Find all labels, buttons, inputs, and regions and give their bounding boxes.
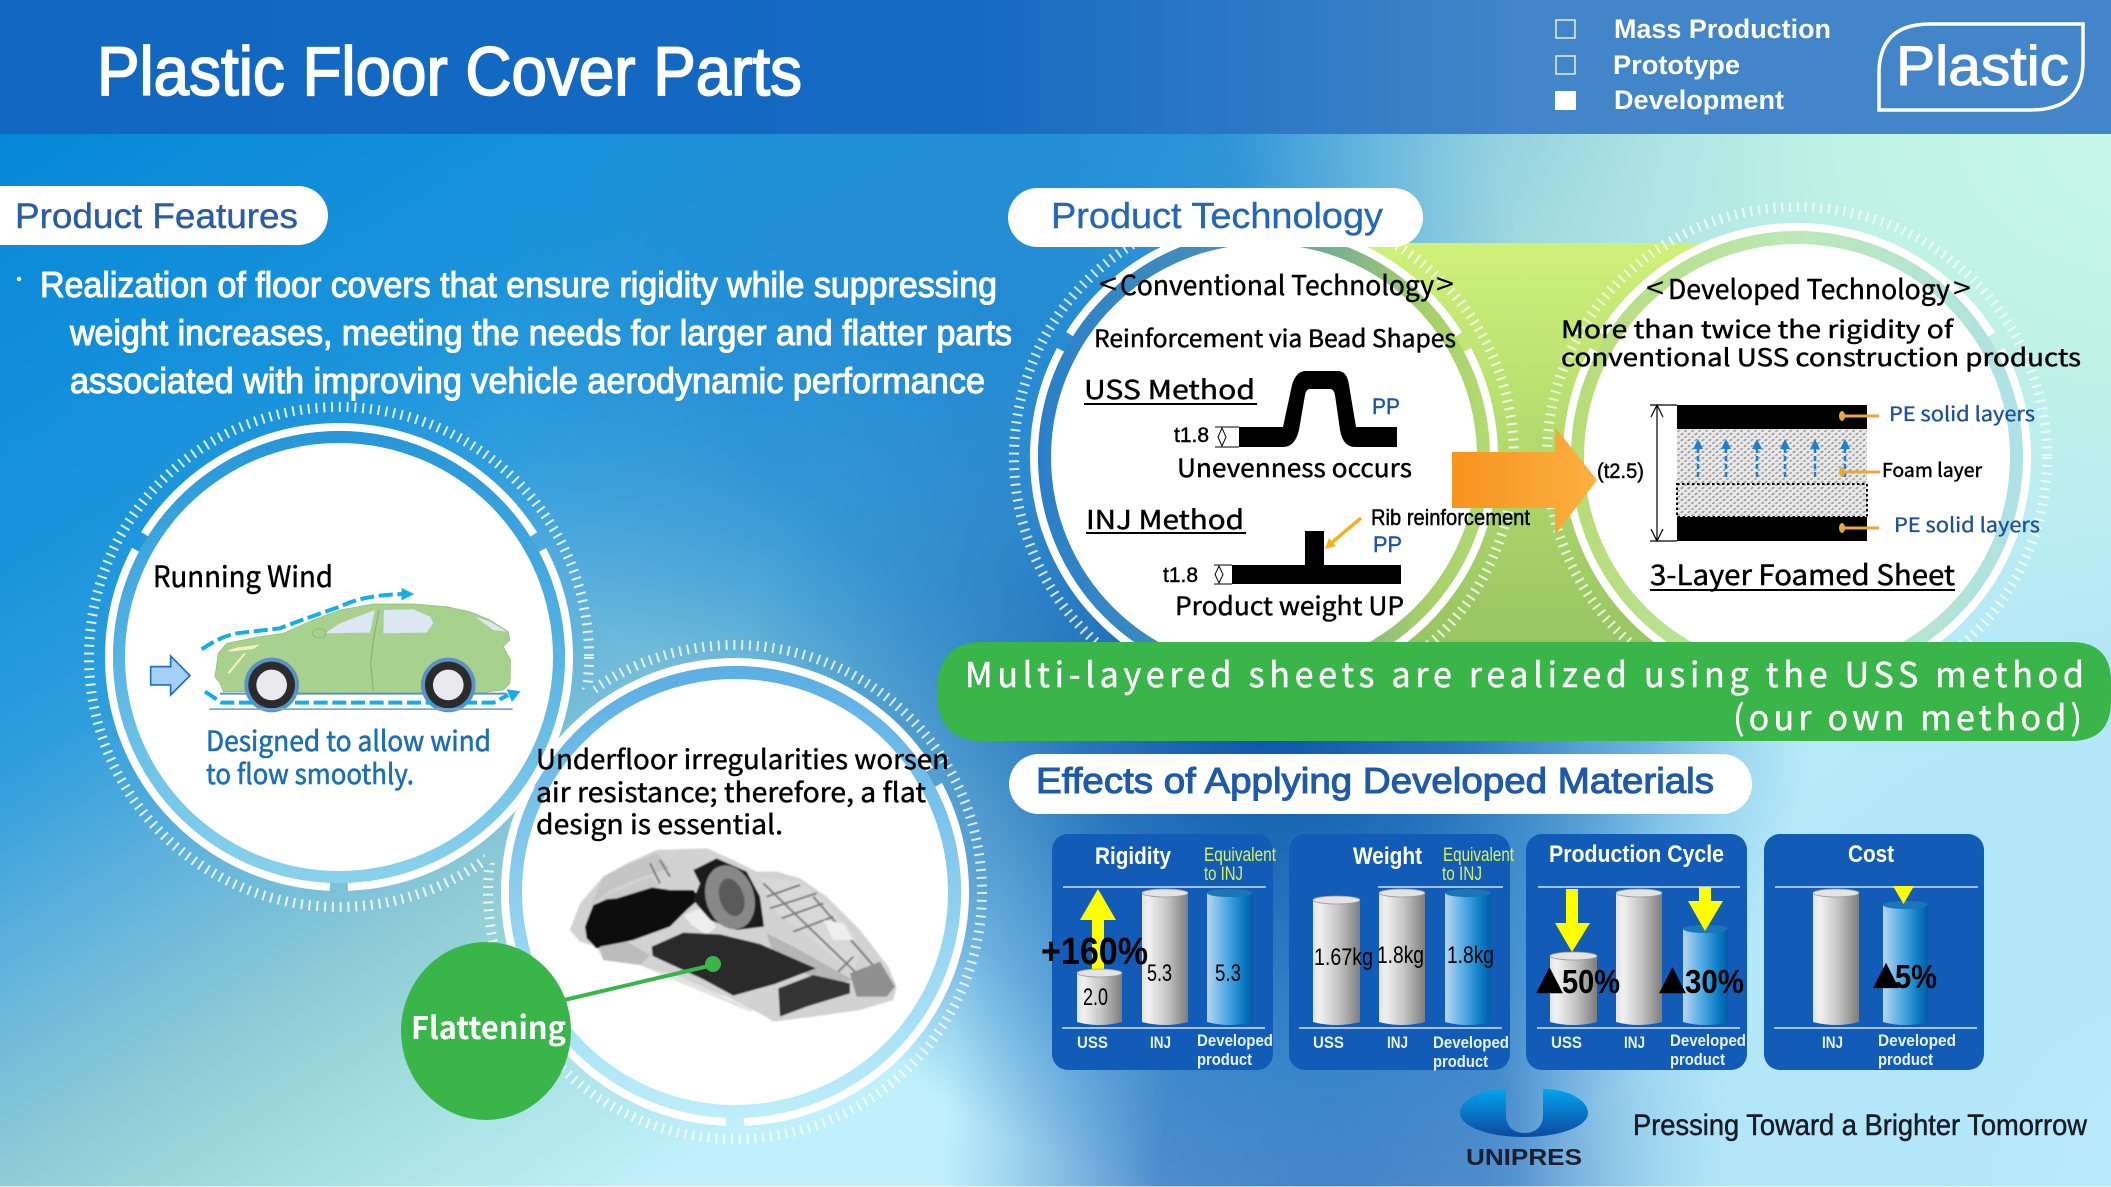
callout: reduction 5%: ▲ [1873,953,1900,992]
callouts: reductions [1536,958,1744,1000]
chart: rigidity: product [1197,1050,1252,1069]
chart: cost: Cost [1848,841,1894,868]
bar: developed [1883,886,1928,1025]
callouts: reductions: 50% [1562,963,1620,1000]
callout: reduction 5%: 5% [1895,958,1937,995]
callouts: reductions: ▲ [1659,958,1687,998]
bar: INJ 1.8kg [1379,889,1425,1025]
chart: weight: 1.8kg [1377,942,1424,969]
chart: rigidity [1041,834,1277,1070]
label: PP: PP [1373,532,1402,557]
dimension: t1.8 USS: t1.8 [1174,424,1209,447]
chart: rigidity: Rigidity [1095,843,1172,870]
chart: weight: Developed [1433,1033,1509,1052]
logo: Unipres [1460,1089,1588,1170]
caption: designed for wind [206,720,491,793]
status checklist [1555,14,1831,115]
bar: INJ [1813,889,1859,1025]
arrow: incoming wind [151,656,190,695]
banner: multi-layered sheets: (our own method) [1733,691,2082,740]
heading: INJ method: INJ Method [1086,500,1244,537]
labels: layers [1882,398,2040,538]
bar: INJ 5.3 [1142,889,1188,1025]
chart: weight: 1.67kg [1314,944,1373,971]
heading: developed technology: Developed Technology [1668,268,1950,307]
dimension: total thickness [1597,405,1677,541]
chart: rigidity: to INJ [1204,864,1243,885]
chart: weight: INJ [1387,1033,1408,1052]
chart: weight: Equivalent [1443,845,1515,866]
status checklist: Development [1614,85,1784,115]
text: rigidity claim: conventional USS construction products [1561,338,2081,373]
caption: designed for wind: to flow smoothly. [206,753,414,793]
chart: rigidity: INJ [1150,1033,1171,1052]
heading: conventional technology: > [1436,260,1454,304]
x-ray car underbody image [570,848,897,1022]
text: reinforcement: Reinforcement via Bead Shapes [1094,319,1456,354]
chart: weight [1289,834,1515,1071]
callouts: reductions: ▲ [1536,958,1564,998]
chart: weight: USS [1313,1033,1344,1052]
diagram: INJ rib cross-section [1232,531,1401,584]
dimension: t1.8 INJ [1163,564,1232,587]
label: PP: PP [1372,394,1400,419]
chart: cost: product [1878,1050,1933,1069]
category badge: Plastic [1879,24,2083,110]
category badge: Plastic: Plastic [1896,34,2069,97]
feature description: associated with improving vehicle aerodynamic performance [70,360,985,401]
chart: weight: product [1433,1052,1488,1071]
panel: running wind circle [84,402,594,912]
diagram: USS bead cross-section [1239,371,1397,447]
callout: flattening [401,942,721,1120]
text: underfloor note: Underfloor irregularities worsen [536,738,949,777]
bar: INJ 5.3: 5.3 [1147,960,1172,987]
chart: production cycle: Developed [1670,1031,1746,1050]
text: rigidity claim [1561,310,2081,373]
heading: conventional technology: < [1099,260,1117,304]
chart: production cycle: Production Cycle [1549,841,1724,868]
panel: underfloor flattening circle [483,640,987,1144]
dimension: t1.8 USS [1174,424,1239,447]
chart: rigidity: USS [1077,1033,1108,1052]
chart: production cycle [1526,834,1747,1070]
bar: USS 2.0 [1077,889,1122,1025]
text: underfloor note: design is essential. [536,803,783,842]
dimension: total thickness: (t2.5) [1597,460,1644,483]
chart: cost: Developed [1878,1031,1956,1050]
bar: INJ [1616,889,1662,1025]
bar: developed 1.8kg [1445,889,1491,1025]
dimension: t1.8 INJ: t1.8 [1163,564,1198,587]
foam expansion arrows [1693,439,1850,477]
bar: USS [1550,889,1597,1025]
text: underfloor note: air resistance; therefore, a flat [536,771,926,810]
callout: +160%: +160% [1041,931,1148,973]
icon: aerodynamic car [151,588,521,712]
text: rigidity claim: More than twice the rigidity of [1561,310,1954,345]
bar: developed 5.3 [1207,889,1253,1025]
labels: layers: Foam layer [1882,456,1983,483]
connecting band between technology circles [1320,243,1720,643]
chart: weight: Weight [1353,843,1422,870]
bar: developed [1683,887,1728,1025]
callout: reduction 5% [1873,953,1937,995]
caption: 3-layer foamed sheet: 3-Layer Foamed Sheet [1650,554,1955,594]
banner: multi-layered sheets [937,642,2111,741]
status checklist: Mass Production [1614,14,1831,44]
chart: production cycle: USS [1551,1033,1582,1052]
heading: developed technology: > [1953,264,1971,308]
feature description [17,264,1012,401]
label: running wind: Running Wind [153,554,333,596]
heading: product features [0,186,328,245]
arrow: conventional to developed [1452,427,1597,535]
bar: USS 1.67kg [1313,896,1360,1025]
panel: conventional technology circle [953,146,1575,768]
heading: product technology [1008,188,1423,247]
header bar [0,0,2111,134]
chart: rigidity: Developed [1197,1031,1273,1050]
feature description: weight increases, meeting the needs for larger and flatter parts [69,312,1012,353]
chart: production cycle: INJ [1624,1033,1645,1052]
chart: cost [1764,834,1984,1070]
bar: developed 5.3: 5.3 [1215,960,1241,987]
diagram: three-layer foamed sheet [1597,398,2040,541]
chart: weight: to INJ [1442,864,1482,885]
chart: rigidity: Equivalent [1204,845,1277,866]
banner: multi-layered sheets: Multi-layered sheets are realized using the USS method [965,648,2084,697]
labels: layers: PE solid layers [1894,509,2040,538]
text: unevenness occurs: Unevenness occurs [1177,449,1412,485]
bar: USS 2.0: 2.0 [1083,984,1108,1011]
airflow streamlines [202,594,403,649]
heading: product technology: Product Technology [1051,195,1383,236]
logo: Unipres: UNIPRES [1466,1144,1582,1170]
chart: cost: INJ [1822,1033,1843,1052]
callouts: reductions: 30% [1685,963,1744,1000]
callout: flattening: Flattening [411,1003,566,1048]
feature description: Realization of floor covers that ensure rigidity while suppressing [40,264,997,305]
status checklist: Prototype [1613,50,1740,80]
title: Plastic Floor Cover Parts [97,33,802,110]
arrow: rib pointer [1325,518,1361,549]
heading: effects: Effects of Applying Developed Materials [1036,760,1714,801]
chart: weight: 1.8kg [1447,942,1494,969]
leader lines [1839,411,1880,533]
heading: USS method: USS Method [1084,370,1255,407]
labels: layers: PE solid layers [1889,398,2035,427]
chart: production cycle: product [1670,1050,1725,1069]
text: underfloor note [536,738,949,842]
heading: effects [1009,754,1752,814]
caption: designed for wind: Designed to allow wind [206,720,491,760]
label: rib reinforcement: Rib reinforcement [1371,505,1530,530]
heading: conventional technology: Conventional Technology [1120,264,1434,303]
heading: developed technology: < [1646,264,1664,308]
text: product weight up: Product weight UP [1175,587,1404,623]
heading: product features: Product Features [15,197,298,236]
panel: developed technology circle [1486,146,2108,768]
